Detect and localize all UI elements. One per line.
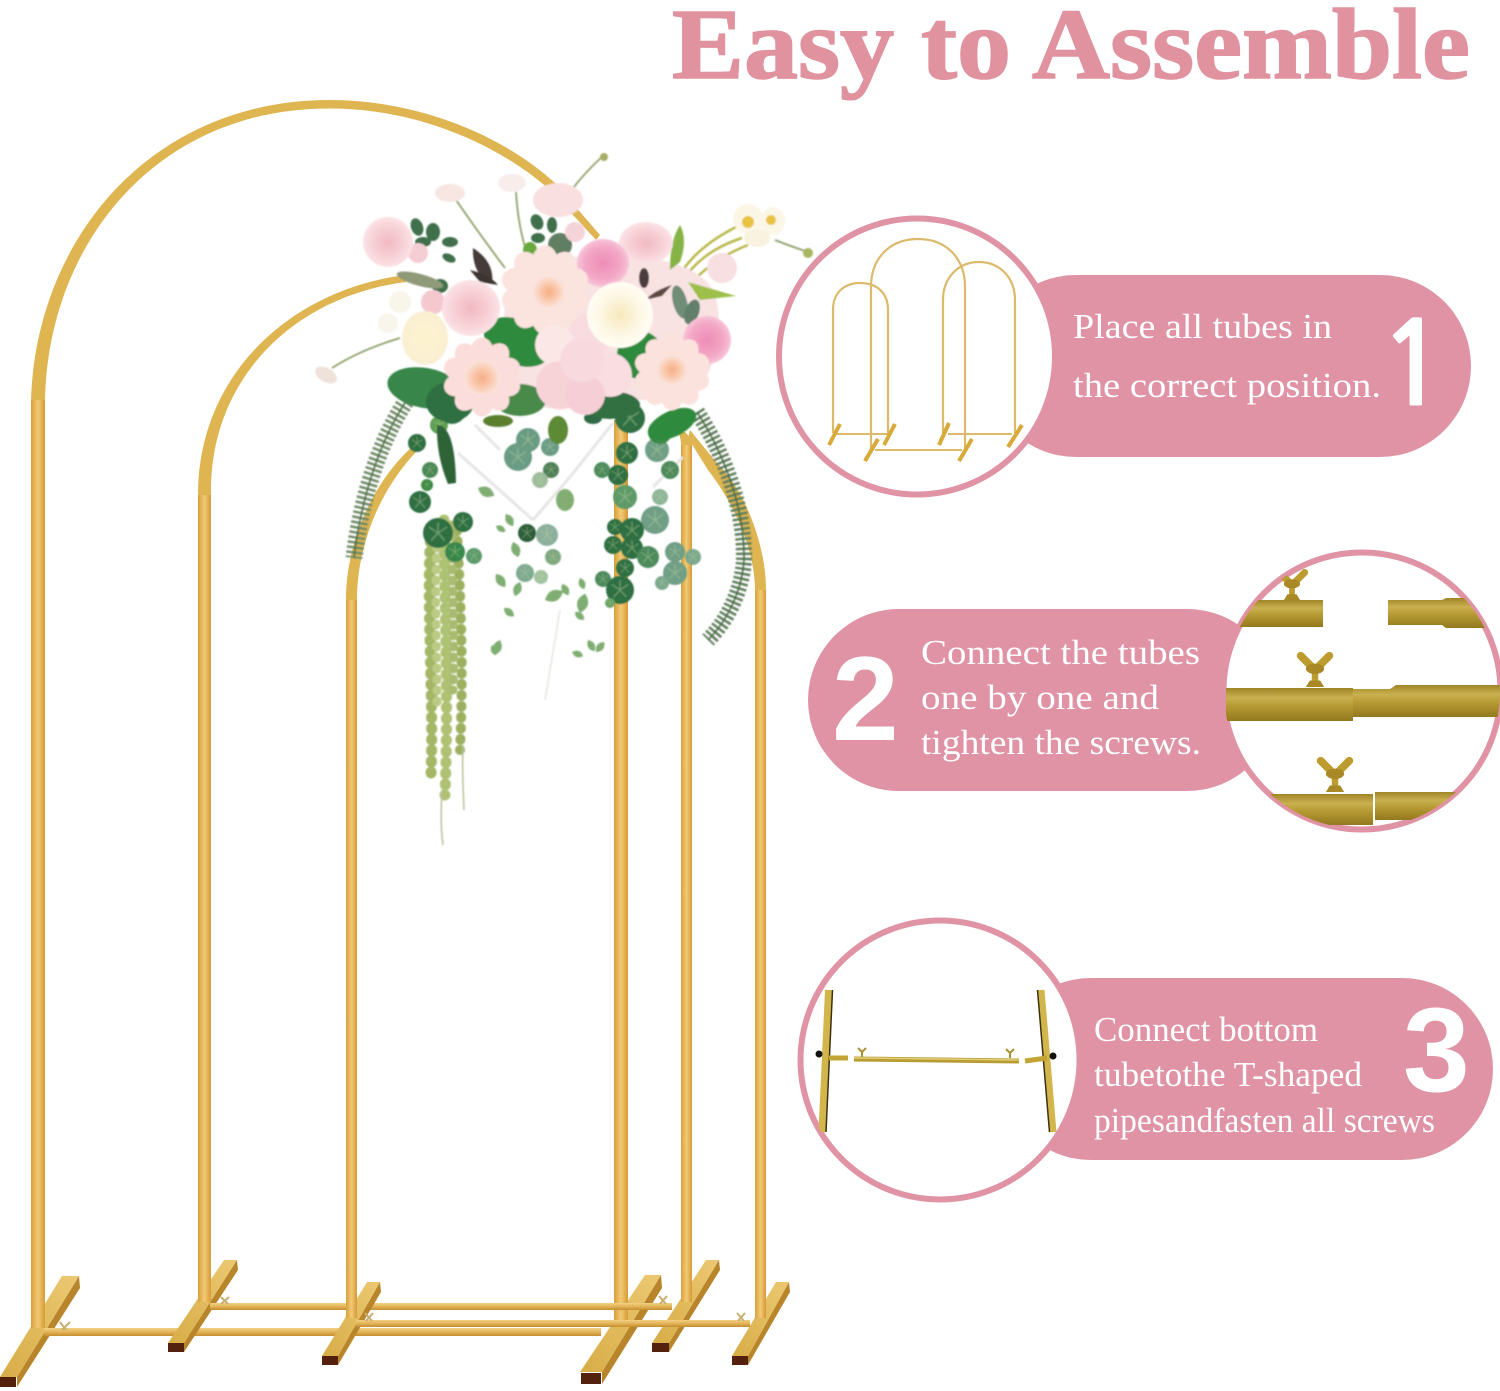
peonies and roses [363,217,413,267]
right hanging eucalyptus [594,403,701,608]
centre sage leaves [483,412,602,584]
floral arrangement [312,153,813,845]
step 1 text: Place all tubes in [1073,307,1332,346]
step 2 number: 2 [832,632,899,766]
mini arches [829,239,1022,461]
step 2 text [921,633,1201,762]
step 3 pill [1000,978,1493,1160]
blush mass behind blooms [500,255,719,410]
step 3 circle [800,920,1080,1200]
step 2 circle [1220,552,1500,830]
small scattered leaves [476,484,607,659]
palm green behind blooms [384,284,703,447]
hydrangea [535,313,632,415]
step 2 text: Connect the tubes [921,633,1200,672]
thin stems [332,155,808,700]
pale veil ribbons [458,423,683,520]
step 1 pill [985,275,1471,457]
step 3 text: Connect bottom [1094,1010,1318,1049]
step 3 text: tubetothe T-shaped [1094,1055,1363,1094]
step 2 pill [808,609,1278,791]
step 2 text: one by one and [921,678,1160,717]
disassembled base parts [816,990,1056,1132]
step 1 circle [779,218,1055,494]
large gold arch [0,100,662,1387]
fern fronds [354,385,744,640]
medium gold arch [168,275,720,1352]
step 3 number: 3 [1403,983,1470,1117]
step 1 number: 1 [1378,308,1448,423]
step 3 text [1094,1010,1435,1140]
small gold arch [322,430,790,1365]
top foliage [395,212,736,300]
dark hanging leaf [437,425,456,484]
step 2 text: tighten the screws. [921,723,1201,762]
step 1 text [1073,307,1381,405]
small top blossoms [435,184,465,202]
white blooms with yellow centres [733,204,785,247]
step 3 text: pipesandfasten all screws [1094,1101,1435,1140]
step 1 text: the correct position. [1073,366,1381,405]
hanging bead strands [429,520,462,795]
connecting tube photos [1220,572,1500,825]
left hanging eucalyptus [408,396,482,564]
